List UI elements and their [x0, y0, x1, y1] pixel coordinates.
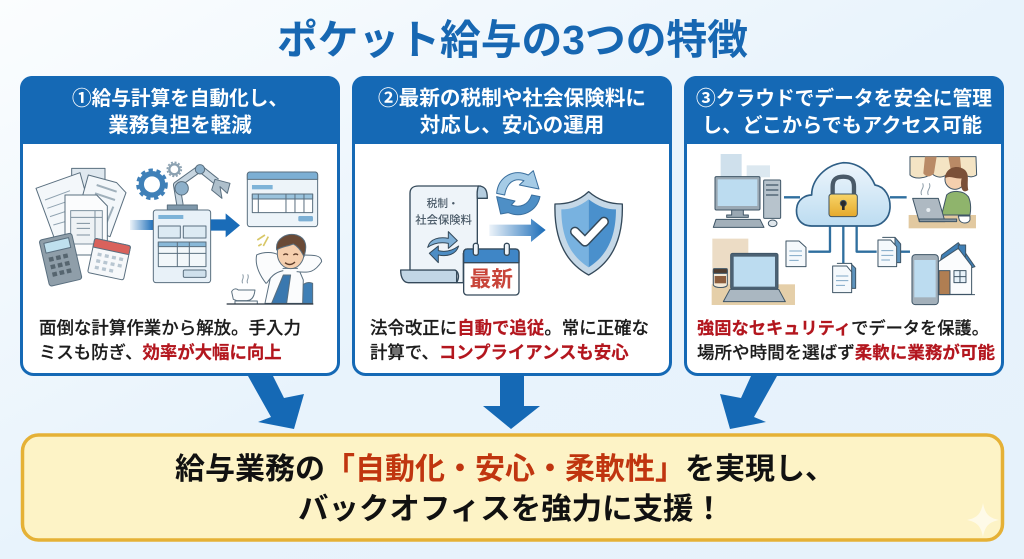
icon: calendar latest: 最新	[470, 267, 513, 292]
panel: automation	[20, 76, 340, 374]
summary banner	[22, 435, 1002, 540]
icon: robot arm	[167, 165, 230, 210]
panel 2 text: 計算で、コンプライアンスも安心	[370, 342, 629, 362]
summary text	[175, 453, 835, 526]
panel: compliance	[352, 76, 672, 374]
network lines	[784, 197, 910, 263]
icon: document left	[786, 241, 806, 267]
title: ポケット給与の3つの特徴	[277, 17, 748, 63]
panel 3 header	[684, 76, 1004, 144]
icon: relaxed worker with coffee	[227, 234, 322, 304]
arrow: panel 2 to summary	[483, 376, 540, 429]
arrow: panel 1 to summary	[248, 376, 304, 429]
panel 3 header: ③クラウドでデータを安全に管理	[696, 86, 992, 110]
panel 3 header: し、どこからでもアクセス可能	[702, 114, 982, 137]
panel 2 illustration: law scroll to shield	[401, 171, 622, 295]
summary text: バックオフィスを強力に支援！	[298, 493, 724, 526]
panel 2 text: 法令改正に自動で追従。常に正確な	[370, 318, 649, 338]
arrow	[489, 219, 546, 242]
arrow	[211, 213, 240, 237]
icon: shield check	[555, 192, 622, 275]
icon: calculator	[39, 233, 82, 286]
icon: worker at cafe	[909, 157, 977, 228]
icon: gears	[138, 162, 181, 199]
panel 1 header	[20, 76, 340, 144]
panel 1 header: ①給与計算を自動化し、	[72, 87, 288, 110]
panel 3 text: 場所や時間を選ばず柔軟に業務が可能	[697, 342, 995, 362]
icon: document right	[878, 237, 901, 267]
icon: tax scroll	[401, 186, 487, 283]
icon: form document	[130, 210, 211, 283]
panel 1 header: 業務負担を軽減	[108, 113, 252, 137]
icon: calendar latest	[464, 243, 519, 295]
icon: desktop computer	[713, 154, 781, 227]
icon: tax scroll: 社会保険料	[415, 212, 472, 226]
panel 3 illustration: cloud network	[712, 154, 977, 305]
arrow: panel 3 to summary	[720, 376, 777, 429]
icon: tax scroll: 税制・	[427, 197, 459, 210]
icon: document center	[833, 263, 856, 293]
panel 1 text	[39, 318, 301, 362]
icon: calendar	[88, 238, 131, 280]
icon: phone and house	[912, 243, 975, 305]
icon: paper stack	[36, 168, 126, 255]
panel 1 text: ミスも防ぎ、効率が大幅に向上	[39, 342, 282, 362]
icon: software window	[247, 172, 318, 227]
icon: cloud with padlock	[797, 163, 890, 226]
panel 2 header	[352, 76, 672, 144]
panel 3 text: 強固なセキュリティでデータを保護。	[697, 318, 989, 338]
panel: cloud	[684, 76, 1004, 374]
panel 2 header: ②最新の税制や社会保険料に	[378, 87, 646, 110]
sparkle	[967, 503, 999, 537]
panel 3 text	[697, 318, 995, 362]
icon: laptop at cafe	[712, 239, 795, 305]
icon: refresh arrows	[497, 171, 540, 215]
panel 2 text	[370, 318, 649, 362]
panel 1 illustration: documents to relaxed worker	[36, 162, 322, 304]
panel 1 text: 面倒な計算作業から解放。手入力	[39, 318, 301, 338]
panel 2 header: 対応し、安心の運用	[420, 114, 604, 137]
summary text: 給与業務の「自動化・安心・柔軟性」を実現し、	[175, 453, 835, 486]
